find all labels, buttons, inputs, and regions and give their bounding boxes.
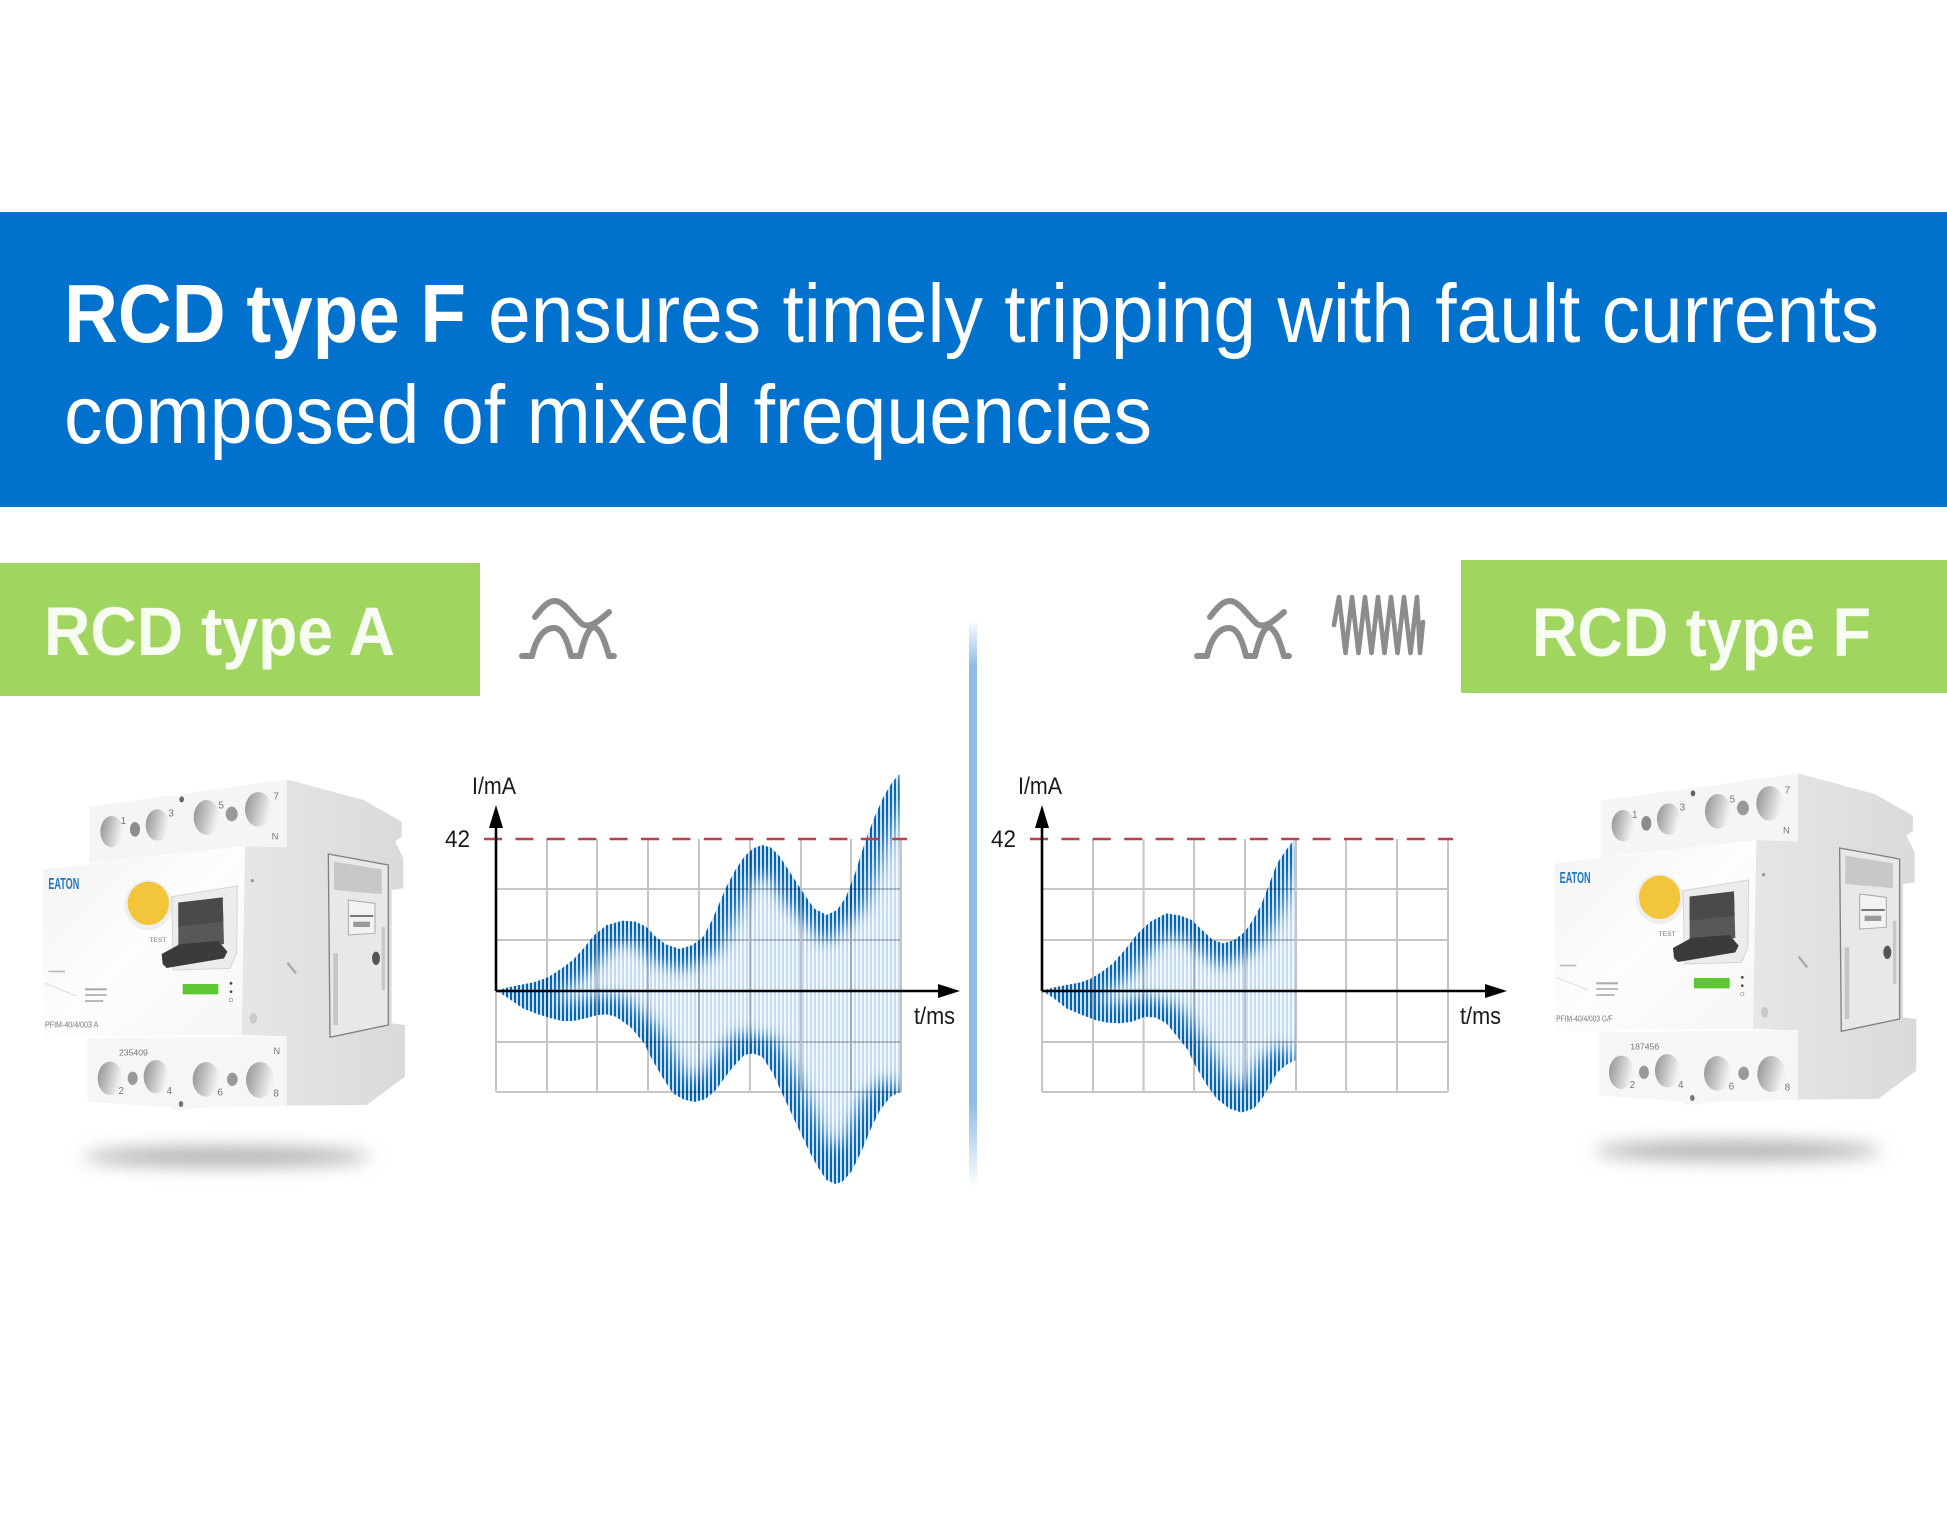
axis labels: t/ms [1460,1003,1501,1030]
breaker shadow [1595,1141,1881,1161]
title text [64,267,1879,461]
center divider [969,620,977,1188]
breaker: RCD type F [1555,773,1916,1161]
breaker markings: 7 [1785,785,1791,796]
breaker markings: 3 [168,809,174,820]
axis labels: I/mA [1018,773,1062,800]
chart: RCD type F fault current [992,776,1507,1112]
title text: composed of mixed frequencies [64,368,1152,461]
waveform envelope [1044,840,1296,1112]
breaker body [43,779,405,1111]
breaker markings: 7 [273,791,279,802]
waveform envelope [498,774,902,1184]
breaker markings [45,791,280,1100]
title text: RCD type F [64,267,466,360]
breaker markings: 2 [118,1086,124,1097]
icon: high-frequency zigzag [1334,597,1423,653]
breaker: RCD type A [43,779,405,1167]
axis labels: I/mA [472,773,516,800]
chart grid [496,839,901,1092]
axis labels: 42 [991,826,1016,853]
breaker markings: 8 [273,1089,279,1100]
breaker markings: 5 [1730,794,1736,805]
axis labels [445,773,955,1030]
chart: RCD type A fault current [445,760,960,1200]
label: RCD type F: RCD type F [1532,594,1871,671]
breaker markings: PFIM-40/4/003 G/F [1556,1013,1613,1023]
axes [1035,805,1507,998]
breaker markings: 6 [1729,1081,1735,1092]
breaker markings [1556,785,1791,1094]
breaker shadow [83,1147,370,1167]
breaker markings: 4 [167,1086,173,1097]
label: RCD type A [0,563,480,696]
breaker markings: TEST [1659,931,1676,938]
breaker markings: N [272,831,278,841]
chart grid [1042,839,1448,1092]
breaker markings: N [1783,825,1790,835]
breaker markings: N [273,1046,280,1056]
threshold line at 42 [1030,838,1453,840]
breaker markings: EATON [1560,870,1591,887]
breaker markings: 1 [121,816,127,827]
title banner [0,212,1947,507]
axis labels: 42 [445,826,470,853]
label: RCD type F [1461,560,1947,693]
breaker markings: 2 [1630,1080,1636,1091]
threshold line at 42 [484,838,907,840]
breaker markings: 1 [1632,810,1638,821]
axes [489,805,960,998]
breaker markings: 5 [218,800,224,811]
title text: ensures timely tripping with fault currents [488,267,1879,360]
breaker markings: 3 [1680,803,1686,814]
breaker markings: 4 [1678,1080,1684,1091]
breaker markings: 235409 [119,1048,148,1058]
icon: pulsating half-wave current, type F [1197,601,1289,656]
breaker markings: 6 [217,1087,223,1098]
breaker markings: PFIM-40/4/003 A [45,1019,99,1029]
axis labels [991,773,1501,1030]
label: RCD type A: RCD type A [44,593,395,670]
breaker body [1555,773,1916,1105]
breaker markings: TEST [149,937,166,944]
axis labels: t/ms [914,1003,955,1030]
icon: pulsating half-wave current, type A [522,601,614,656]
breaker markings: 8 [1785,1083,1791,1094]
breaker markings: EATON [48,876,79,893]
breaker markings: 187456 [1630,1042,1659,1052]
